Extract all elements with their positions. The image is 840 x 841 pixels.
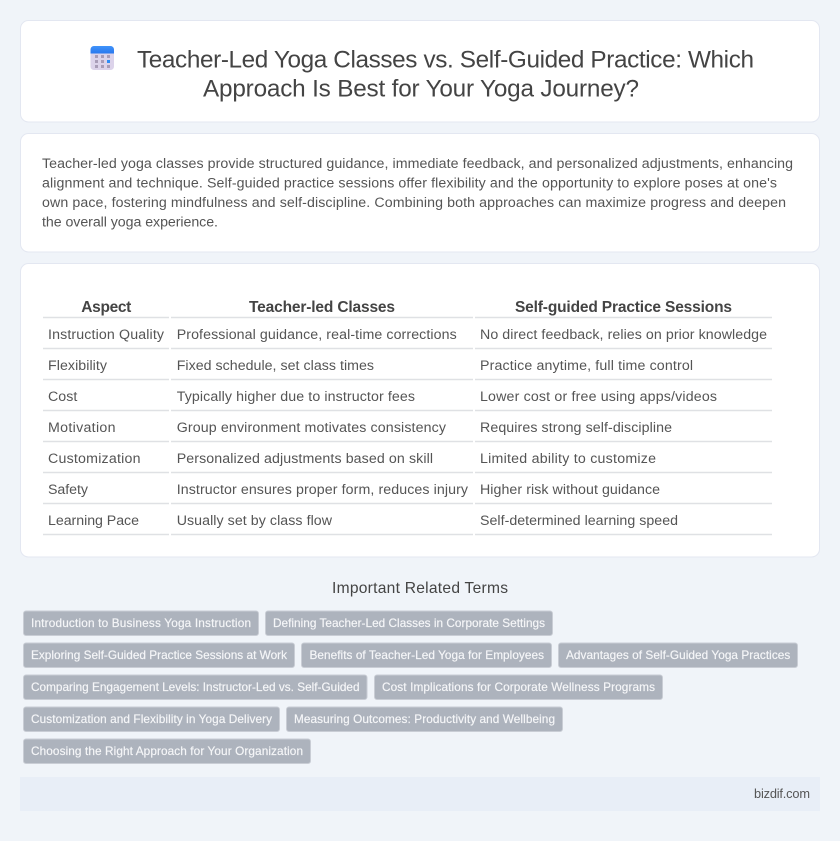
panel: comparison table (20, 264, 820, 557)
heading: Important Related Terms: Important Related Terms (332, 580, 508, 597)
tag (24, 643, 294, 668)
table row: Motivation (48, 420, 672, 436)
tag (374, 675, 662, 700)
text block: introduction: the overall yoga experience. (42, 214, 218, 230)
table row: Flexibility (48, 358, 693, 374)
table row: Cost: Cost (48, 389, 77, 405)
table row: Learning Pace (48, 513, 678, 529)
tag: Customization and Flexibility in Yoga Delivery (31, 712, 272, 726)
table row: Customization: Personalized adjustments based on skill (177, 451, 433, 467)
table row: Instruction Quality (48, 327, 767, 343)
table row: Safety: Higher risk without guidance (480, 482, 660, 498)
title: Approach Is Best for Your Yoga Journey? (203, 76, 639, 102)
table header row: Teacher-led Classes (249, 299, 395, 316)
tag (24, 707, 280, 732)
table row: Instruction Quality: No direct feedback, relies on prior knowledge (480, 327, 767, 343)
table row: Learning Pace: Usually set by class flow (177, 513, 333, 529)
table row: Cost (48, 389, 717, 405)
tag (24, 739, 310, 764)
table row: Safety: Instructor ensures proper form, reduces injury (177, 482, 469, 498)
text block: introduction: Teacher-led yoga classes provide structured guidance, immediate feedback, and personalized adjustments, enhancing (42, 156, 793, 172)
table row: Flexibility: Fixed schedule, set class times (177, 358, 374, 374)
panel: introduction paragraph (20, 134, 820, 252)
table row: Motivation: Motivation (48, 420, 116, 436)
tag: Defining Teacher-Led Classes in Corporate Settings (273, 616, 545, 630)
table header row: Self-guided Practice Sessions (515, 299, 732, 316)
table row: Flexibility: Practice anytime, full time control (480, 358, 693, 374)
table row: Instruction Quality: Instruction Quality (48, 327, 165, 343)
table row: Learning Pace: Self-determined learning speed (480, 513, 678, 529)
tag: Exploring Self-Guided Practice Sessions at Work (31, 648, 287, 662)
footer: bizdif.com (754, 786, 810, 801)
tag (24, 675, 367, 700)
tag: Comparing Engagement Levels: Instructor-Led vs. Self-Guided (31, 680, 360, 694)
tag (24, 611, 258, 636)
tag: Choosing the Right Approach for Your Organization (31, 744, 303, 758)
tag: Cost Implications for Corporate Wellness Programs (382, 680, 655, 694)
text block: introduction: alignment and technique. Self-guided practice sessions offer flexibility and the opportunity to explore poses at one's (42, 176, 777, 192)
table row: Cost: Typically higher due to instructor fees (177, 389, 415, 405)
table row: Customization (48, 451, 656, 467)
table row: Cost: Lower cost or free using apps/videos (480, 389, 717, 405)
title (137, 46, 754, 102)
tag (302, 643, 552, 668)
tag (558, 643, 798, 668)
tag (266, 611, 552, 636)
table header row (81, 299, 732, 316)
tag: Benefits of Teacher-Led Yoga for Employees (310, 648, 544, 662)
table row: Customization: Customization (48, 451, 140, 467)
footer (20, 777, 820, 811)
table row: Safety: Safety (48, 482, 89, 498)
title: Teacher-Led Yoga Classes vs. Self-Guided Practice: Which (137, 46, 754, 74)
tag: Advantages of Self-Guided Yoga Practices (566, 648, 790, 662)
table header row: Aspect (81, 299, 131, 316)
table row: Customization: Limited ability to customize (480, 451, 656, 467)
icon: calendar (90, 46, 114, 70)
tag: Introduction to Business Yoga Instruction (31, 616, 251, 630)
table row: Motivation: Group environment motivates consistency (177, 420, 447, 436)
table row: Learning Pace: Learning Pace (48, 513, 139, 529)
tag cloud: related terms (24, 611, 798, 764)
table row: Instruction Quality: Professional guidance, real-time corrections (177, 327, 457, 343)
tag: Measuring Outcomes: Productivity and Wellbeing (294, 712, 555, 726)
table row: Motivation: Requires strong self-discipline (480, 420, 672, 436)
text block: introduction (42, 156, 793, 230)
header panel (20, 20, 820, 122)
table row: Safety (48, 482, 660, 498)
table row: Flexibility: Flexibility (48, 358, 108, 374)
tag (286, 707, 562, 732)
text block: introduction: own pace, fostering mindfulness and self-discipline. Combining both approaches can maximize progress and deepen (42, 195, 786, 211)
